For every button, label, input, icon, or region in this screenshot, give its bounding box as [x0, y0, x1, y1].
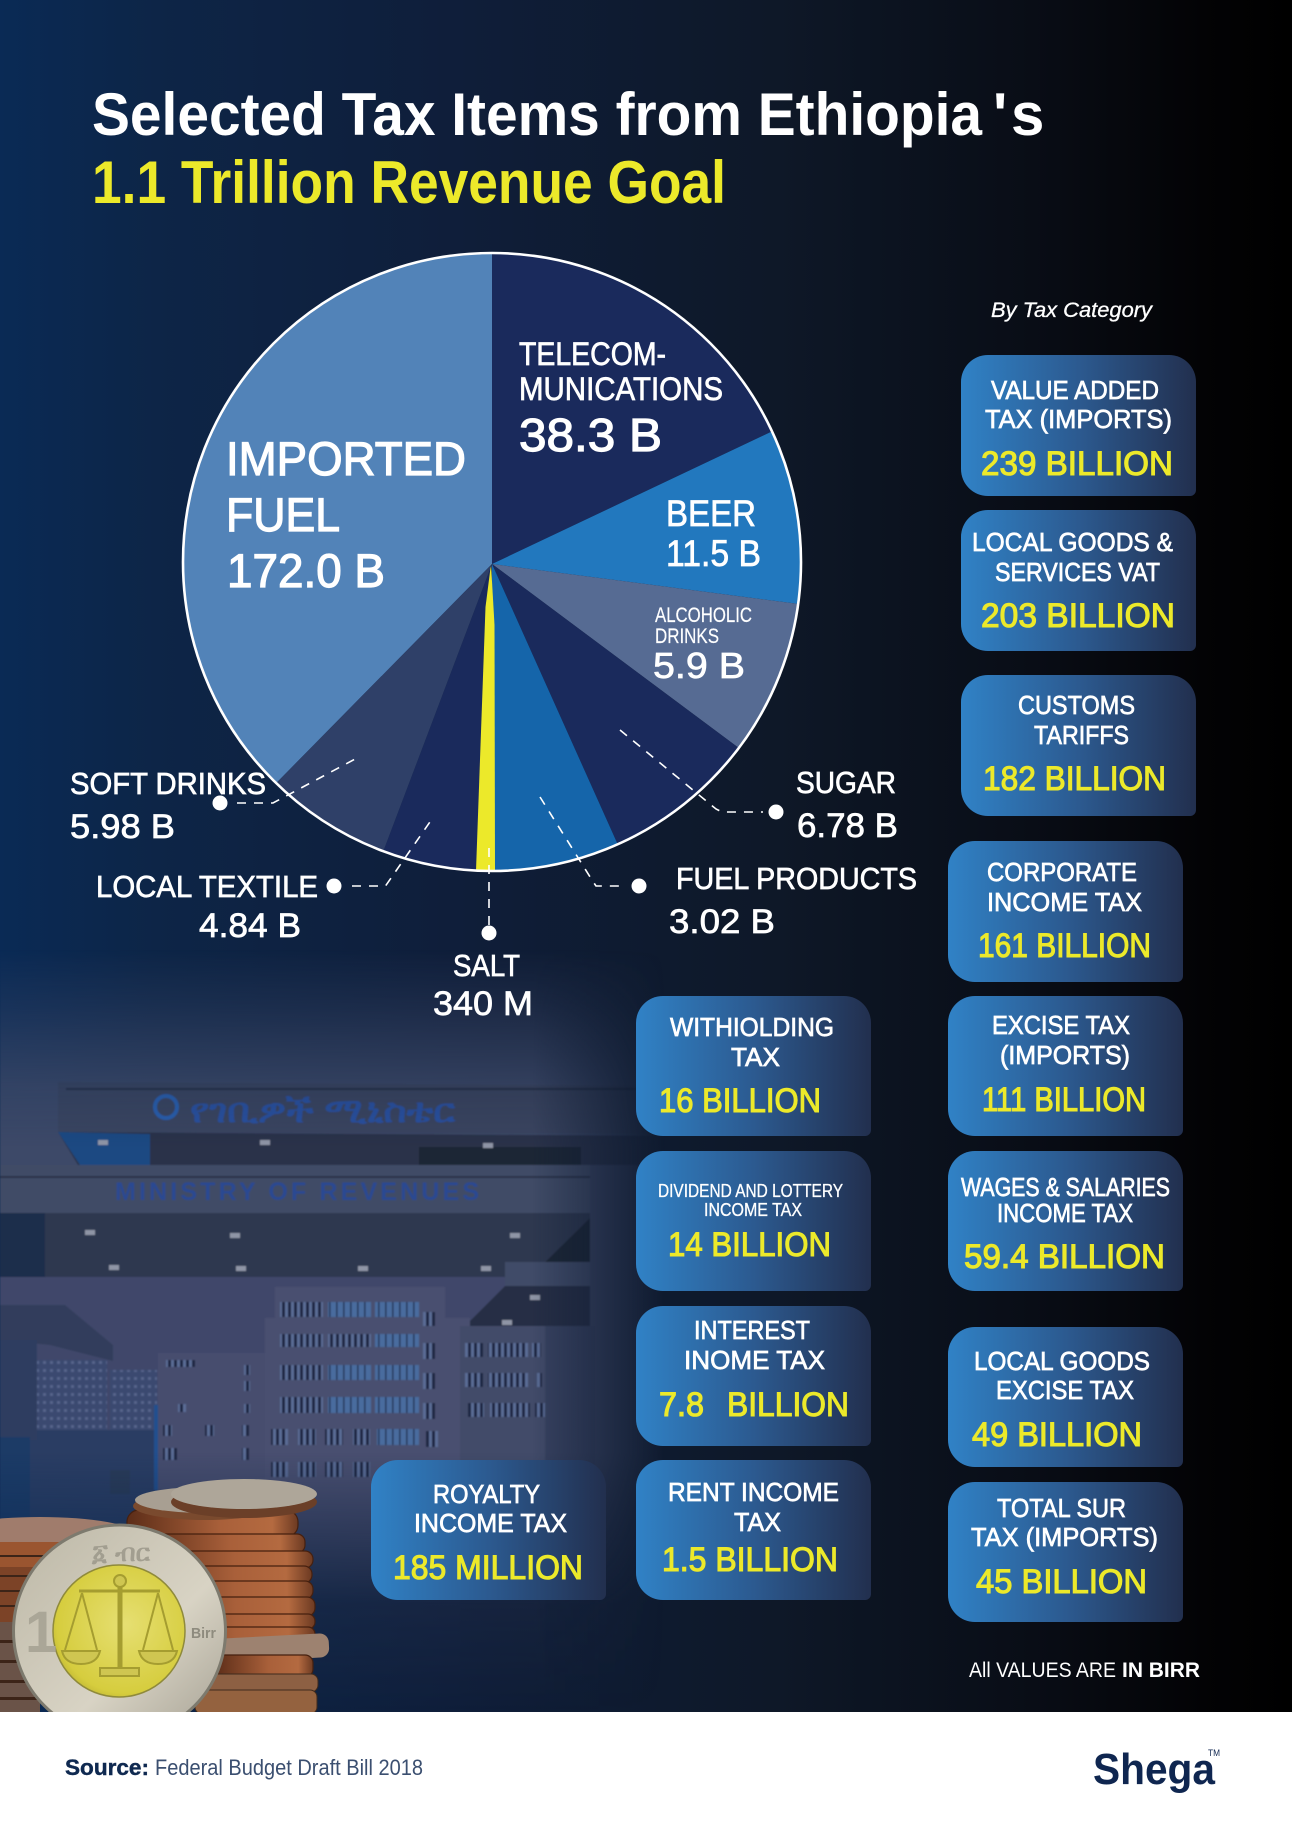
card: value added tax imports: VALUE ADDED: [991, 375, 1159, 405]
label: alcoholic drinks: 5.9 B: [653, 645, 745, 686]
card: corporate income tax: [948, 841, 1183, 982]
card: excise tax imports: (IMPORTS): [1000, 1040, 1130, 1070]
note: all values in birr: IN BIRR: [1122, 1659, 1200, 1682]
pie outline: [183, 253, 801, 871]
callout: soft drinks: [70, 758, 357, 846]
card: royalty income tax: ROYALTY: [433, 1479, 540, 1509]
coin denomination: Birr: [191, 1625, 216, 1642]
card: corporate income tax: INCOME TAX: [987, 887, 1142, 917]
lights on the canopy: [85, 1140, 540, 1325]
card: withholding tax: [636, 996, 871, 1136]
card: total sur tax imports: TAX (IMPORTS): [971, 1522, 1158, 1552]
callout: local textile: LOCAL TEXTILE: [96, 869, 318, 904]
card: customs tariffs: TARIFFS: [1034, 720, 1129, 750]
card: rent income tax: TAX: [734, 1507, 781, 1537]
slice: imported fuel: [183, 253, 492, 783]
source: [65, 1755, 423, 1780]
slice: salt: [476, 564, 495, 871]
card: dividend and lottery income tax: DIVIDEND AND LOTTERY: [658, 1181, 843, 1201]
source: Federal Budget Draft Bill 2018: [155, 1755, 423, 1780]
value: 7.8 billion: 7.8: [659, 1386, 704, 1424]
slice: sugar: [492, 564, 739, 844]
note: all values in birr: All VALUES ARE: [969, 1659, 1116, 1682]
slice: fuel products: [492, 564, 618, 871]
logo: shega: TM: [1208, 1748, 1220, 1758]
card: wages and salaries income tax: INCOME TAX: [997, 1198, 1133, 1228]
label: imported fuel: [226, 432, 466, 597]
card: value added tax imports: TAX (IMPORTS): [985, 404, 1172, 434]
callout: sugar: SUGAR: [796, 765, 896, 800]
card: value added tax imports: 239 BILLION: [981, 445, 1173, 483]
label: telecommunications: [519, 336, 723, 461]
callout: soft drinks: 5.98 B: [70, 808, 175, 846]
label: beer: 11.5 B: [666, 533, 761, 574]
card: local goods excise tax: LOCAL GOODS: [974, 1346, 1150, 1376]
photo: ministry of revenues building: [0, 983, 643, 1600]
sign: amharic ministry name: የገቢዎች ሚኒስቴር: [190, 1092, 456, 1129]
callout: salt: SALT: [453, 948, 520, 983]
callout: local textile: [96, 819, 432, 945]
label: imported fuel: FUEL: [226, 488, 340, 541]
left copper stack: [0, 1517, 116, 1712]
coin numeral: 1: [25, 1600, 57, 1665]
slice: beer: [492, 431, 801, 604]
heading: by tax category: By Tax Category: [991, 299, 1154, 322]
label: imported fuel: 172.0 B: [227, 544, 385, 597]
logo: shega: Shega: [1093, 1745, 1215, 1794]
label: telecommunications: MUNICATIONS: [519, 371, 723, 407]
card: wages and salaries income tax: 59.4 BILLION: [964, 1238, 1165, 1276]
callout: sugar: 6.78 B: [797, 807, 898, 845]
coin scale: [62, 1575, 177, 1676]
card: withholding tax: 16 BILLION: [659, 1082, 821, 1120]
label: beer: [666, 493, 761, 574]
slice: local textile: [383, 564, 492, 871]
card: excise tax imports: 111 BILLION: [982, 1081, 1146, 1119]
card: local goods and services vat: LOCAL GOODS &: [972, 527, 1173, 557]
card: wages and salaries income tax: [948, 1151, 1183, 1291]
right copper stack: [127, 1510, 330, 1714]
card: withholding tax: WITHIOLDING: [670, 1012, 834, 1042]
card: excise tax imports: EXCISE TAX: [992, 1010, 1130, 1040]
sign: amharic ministry name: [152, 1093, 456, 1125]
left low buildings and towers: [158, 1353, 265, 1712]
card: customs tariffs: [961, 675, 1196, 816]
card: local goods and services vat: [961, 510, 1196, 651]
pie chart: [183, 253, 801, 871]
card: interest income tax: INOME TAX: [684, 1345, 825, 1375]
card: interest income tax: INTEREST: [694, 1315, 810, 1345]
callout: salt: 340 M: [433, 985, 533, 1023]
card: total sur tax imports: TOTAL SUR: [997, 1493, 1126, 1523]
label: telecommunications: 38.3 B: [519, 409, 662, 461]
label: imported fuel: IMPORTED: [226, 432, 466, 485]
windows: [271, 1302, 545, 1477]
callout: fuel products: [540, 797, 917, 941]
title: 's: [993, 81, 1044, 148]
callout: fuel products: 3.02 B: [669, 903, 775, 941]
callout: sugar: [620, 730, 898, 845]
card: customs tariffs: 182 BILLION: [983, 760, 1166, 798]
title: Selected Tax Items from Ethiopia: [92, 81, 983, 148]
card: local goods and services vat: 203 BILLION: [981, 597, 1175, 635]
callout: salt: [433, 848, 533, 1023]
card: rent income tax: RENT INCOME: [668, 1477, 839, 1507]
card: local goods and services vat: SERVICES VAT: [995, 557, 1160, 587]
card: royalty income tax: INCOME TAX: [414, 1508, 567, 1538]
value: 7.8 billion: [659, 1386, 849, 1424]
card: total sur tax imports: [948, 1482, 1183, 1622]
card: dividend and lottery income tax: [636, 1151, 871, 1291]
callout: local textile: 4.84 B: [199, 907, 301, 945]
slice: soft drinks: [276, 564, 492, 851]
card: wages and salaries income tax: WAGES & SALARIES: [961, 1172, 1170, 1202]
card: customs tariffs: CUSTOMS: [1018, 690, 1135, 720]
main office block: [266, 1319, 470, 1478]
source: Source:: [65, 1755, 149, 1780]
card: royalty income tax: 185 MILLION: [393, 1549, 583, 1587]
label: beer: BEER: [666, 493, 756, 534]
value: 7.8 billion: BILLION: [727, 1386, 849, 1424]
slice: alcoholic drinks: [492, 564, 798, 748]
coin amharic top: ፩ ብር: [91, 1540, 151, 1567]
note: all values in birr: [969, 1659, 1200, 1682]
card: rent income tax: 1.5 BILLION: [662, 1541, 838, 1579]
label: alcoholic drinks: [653, 604, 752, 686]
footer band: [0, 1712, 1292, 1824]
card: value added tax imports: [961, 355, 1196, 496]
label: telecommunications: TELECOM-: [519, 336, 666, 372]
card: local goods excise tax: EXCISE TAX: [996, 1375, 1134, 1405]
card: royalty income tax: [371, 1460, 606, 1600]
card: dividend and lottery income tax: 14 BILLION: [668, 1226, 831, 1264]
slice: telecommunications: [492, 253, 772, 564]
callout: soft drinks: SOFT DRINKS: [70, 766, 266, 801]
callout: fuel products: FUEL PRODUCTS: [676, 861, 917, 896]
card: total sur tax imports: 45 BILLION: [976, 1563, 1147, 1601]
one birr coin: [14, 1525, 226, 1737]
card: interest income tax: [636, 1306, 871, 1446]
sign: ministry of revenues: MINISTRY OF REVENUES: [115, 1178, 479, 1206]
coins: [0, 1479, 330, 1737]
label: alcoholic drinks: ALCOHOLIC: [655, 604, 752, 627]
title: [92, 81, 1044, 216]
card: excise tax imports: [948, 996, 1183, 1136]
card: local goods excise tax: 49 BILLION: [972, 1416, 1142, 1454]
card: corporate income tax: CORPORATE: [987, 857, 1137, 887]
label: alcoholic drinks: DRINKS: [655, 625, 719, 648]
silver coins on top: [133, 1479, 317, 1520]
card: local goods excise tax: [948, 1327, 1183, 1467]
card: corporate income tax: 161 BILLION: [978, 927, 1151, 965]
card: dividend and lottery income tax: INCOME TAX: [704, 1200, 802, 1220]
card: withholding tax: TAX: [731, 1042, 780, 1072]
subtitle: 1.1 Trillion Revenue Goal: [92, 149, 726, 216]
card: rent income tax: [636, 1460, 871, 1600]
